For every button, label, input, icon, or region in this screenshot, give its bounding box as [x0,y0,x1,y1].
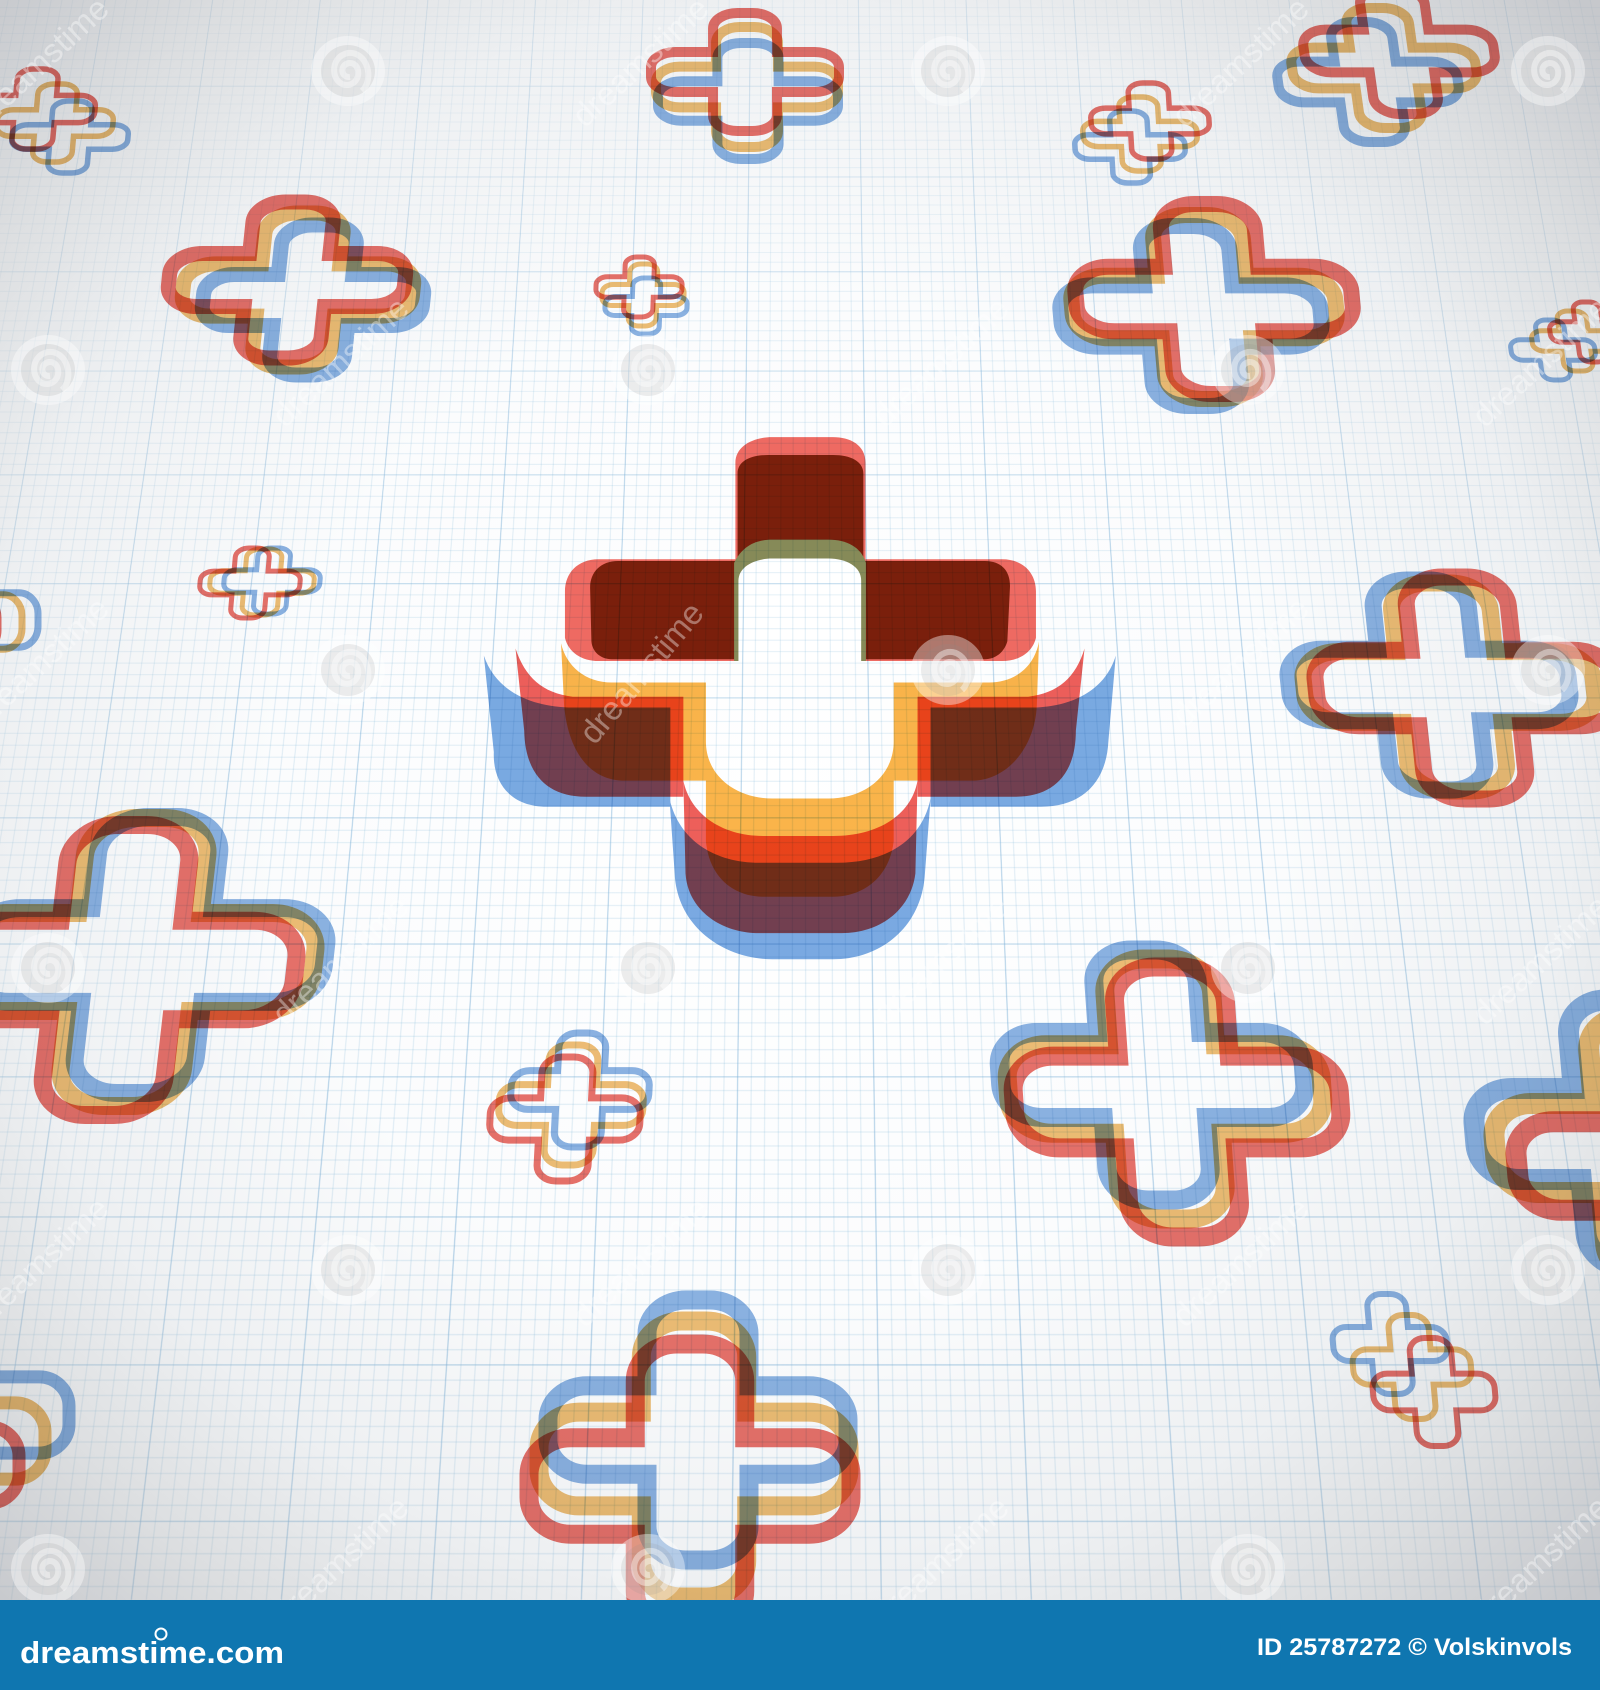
icon: outlined cross, left edge partial [0,540,38,704]
front wall: blue layer [484,656,1116,959]
icon: outlined cross, upper right large [1053,204,1360,406]
icon: outlined cross, lower right large [991,950,1349,1237]
footer banner [0,1600,1600,1690]
icon: outlined cross, top right corner [1270,0,1503,142]
front wall: red layer [516,649,1085,933]
icon: outlined cross, small upper centre [595,257,688,334]
icon: outlined cross, bottom left edge [0,1303,69,1577]
icon: outlined cross, lower left large [0,817,341,1115]
back wall: red frame [565,437,1036,661]
watermark text: dreamstime [1165,1189,1316,1334]
watermark text: dreamstime [865,887,1016,1032]
watermark text: dreamstime [265,289,416,434]
icon: outlined cross, right middle large [1278,577,1600,799]
icon: outlined cross, upper left large [161,202,431,375]
watermark text: dreamstime [265,887,416,1032]
top face: white centre [738,559,861,661]
icon: outlined cross, bottom centre large [529,1300,851,1628]
back wall: dark interior [590,455,1010,659]
icon: outlined cross, top centre [651,13,839,159]
icon: outlined cross, top left small [0,69,131,173]
icon: central 3D cross [484,437,1116,959]
front wall: orange layer [561,641,1039,897]
watermark text: dreamstime [572,595,711,751]
icon: outlined cross, small top right [1073,83,1211,183]
watermark text: dreamstime [565,1189,716,1334]
back wall: olive inner band [734,540,866,661]
watermark text: dreamstime [865,289,1016,434]
icon: outlined cross, lower centre small [487,1033,652,1181]
watermark text: dreamstime [1165,589,1316,734]
footer image id and author: ID 25787272 © Volskinvols [1257,1634,1572,1661]
icon: outlined cross, lower right small [1329,1294,1500,1446]
icon: outlined cross, right edge lower [1463,1000,1600,1296]
icon: outlined cross, right edge small [1507,302,1600,380]
icon: outlined cross, left small [197,548,323,618]
footer logo: dreamstime.com [20,1635,284,1670]
